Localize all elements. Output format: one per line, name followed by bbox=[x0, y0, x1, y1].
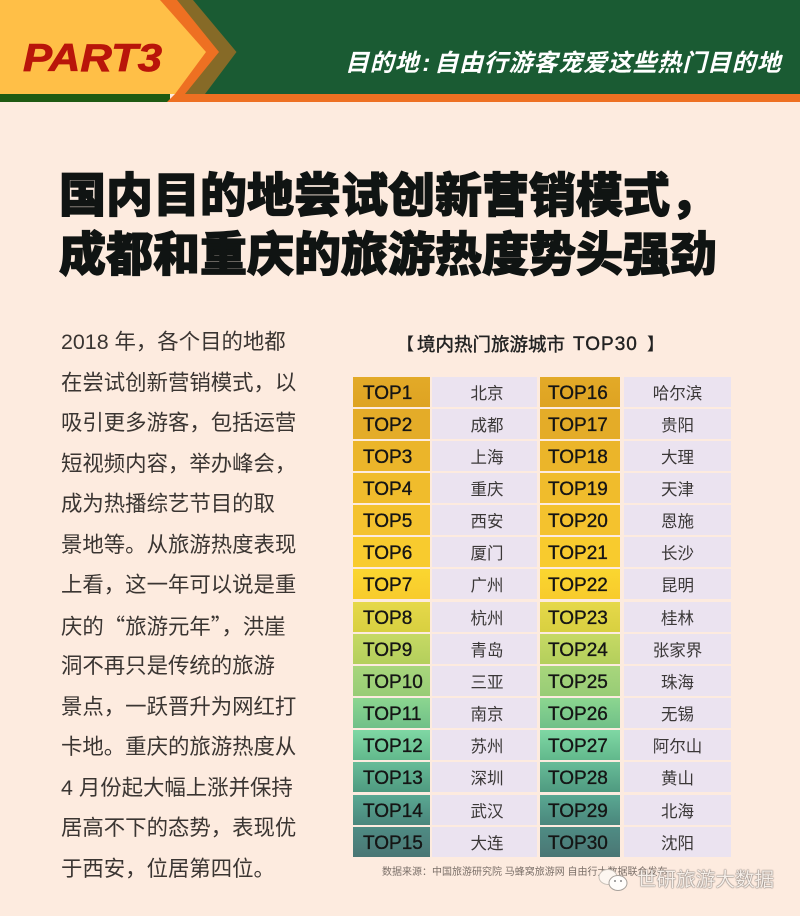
ranking table: 黄山 bbox=[661, 770, 694, 788]
ranking table: TOP9 bbox=[363, 640, 412, 661]
ranking table: TOP24 bbox=[548, 640, 608, 661]
ranking table: TOP16 bbox=[548, 383, 608, 404]
ranking table: 天津 bbox=[661, 481, 694, 499]
ranking table: TOP6 bbox=[363, 543, 412, 564]
ranking table: 苏州 bbox=[470, 738, 504, 756]
ranking table: TOP11 bbox=[363, 704, 421, 725]
data source note: 数据来源：中国旅游研究院 马蜂窝旅游网 自由行大数据联合发布 bbox=[382, 867, 668, 878]
table heading: TOP30 bbox=[573, 334, 638, 355]
body paragraph: 2018 年，各个目的地都 bbox=[61, 330, 286, 354]
ranking table: TOP25 bbox=[548, 672, 608, 693]
ranking table: TOP2 bbox=[363, 415, 412, 436]
ranking table: TOP14 bbox=[363, 801, 423, 822]
body paragraph: 在尝试创新营销模式，以 bbox=[61, 371, 296, 395]
ranking table: 桂林 bbox=[661, 610, 694, 628]
body paragraph: 短视频内容，举办峰会， bbox=[61, 452, 296, 476]
watermark text: 世研旅游大数据 bbox=[637, 869, 774, 891]
ranking table: TOP22 bbox=[548, 575, 608, 596]
body paragraph: 吸引更多游客，包括运营 bbox=[61, 411, 296, 435]
ranking table: 重庆 bbox=[470, 481, 504, 499]
ranking table: 成都 bbox=[470, 417, 504, 435]
body paragraph: 景地等。从旅游热度表现 bbox=[61, 533, 296, 557]
ranking table: TOP23 bbox=[548, 608, 608, 629]
ranking table: 广州 bbox=[470, 577, 504, 595]
ranking table: 大连 bbox=[470, 835, 504, 853]
ranking table: TOP30 bbox=[548, 833, 608, 854]
main headline bbox=[59, 169, 717, 281]
ranking table: 珠海 bbox=[661, 674, 694, 692]
ranking table: 恩施 bbox=[661, 513, 694, 531]
ranking table: TOP17 bbox=[548, 415, 608, 436]
ranking table: TOP3 bbox=[363, 447, 412, 468]
table heading: 【 bbox=[397, 335, 414, 354]
ranking table: TOP18 bbox=[548, 447, 608, 468]
ranking table: TOP13 bbox=[363, 768, 423, 789]
ranking table: TOP28 bbox=[548, 768, 608, 789]
icon: wechat watermark bbox=[598, 869, 628, 891]
ranking table bbox=[353, 377, 731, 857]
body paragraph: 4 月份起大幅上涨并保持 bbox=[61, 776, 293, 800]
PART3 badge: PART3 bbox=[23, 37, 162, 80]
table heading: 】 bbox=[647, 335, 664, 354]
ranking table: TOP8 bbox=[363, 608, 412, 629]
ranking table: TOP1 bbox=[363, 383, 412, 404]
body paragraph: 上看，这一年可以说是重 bbox=[61, 573, 296, 597]
ranking table: 阿尔山 bbox=[653, 738, 702, 756]
ranking table: 杭州 bbox=[470, 610, 504, 628]
ranking table: 贵阳 bbox=[661, 417, 694, 435]
ranking table: 北京 bbox=[470, 385, 504, 403]
ranking table: TOP10 bbox=[363, 672, 423, 693]
ranking table: TOP15 bbox=[363, 833, 423, 854]
ranking table: 深圳 bbox=[470, 770, 504, 788]
ranking table: TOP5 bbox=[363, 511, 412, 532]
ranking table: 长沙 bbox=[661, 545, 694, 563]
PART3 badge bbox=[0, 0, 206, 94]
table heading: 境内热门旅游城市 bbox=[417, 334, 565, 355]
ranking table: TOP19 bbox=[548, 479, 608, 500]
ranking table: TOP26 bbox=[548, 704, 608, 725]
main headline: 国内目的地尝试创新营销模式， bbox=[59, 169, 717, 222]
body paragraph: 洞不再只是传统的旅游 bbox=[61, 654, 275, 678]
ranking table: 昆明 bbox=[661, 577, 694, 595]
ranking table: TOP4 bbox=[363, 479, 412, 500]
ranking table: 沈阳 bbox=[661, 835, 694, 853]
ranking table: TOP20 bbox=[548, 511, 608, 532]
ranking table: 三亚 bbox=[470, 674, 504, 692]
ranking table: 张家界 bbox=[653, 642, 702, 660]
ranking table: 西安 bbox=[470, 513, 504, 531]
ranking table: TOP7 bbox=[363, 575, 412, 596]
main headline: 成都和重庆的旅游热度势头强劲 bbox=[59, 228, 717, 281]
ranking table: 无锡 bbox=[661, 706, 694, 724]
ranking table: TOP27 bbox=[548, 736, 608, 757]
body paragraph: 庆的“旅游元年”，洪崖 bbox=[61, 610, 286, 641]
body paragraph: 卡地。重庆的旅游热度从 bbox=[61, 735, 296, 759]
ranking table: 厦门 bbox=[470, 545, 504, 563]
ranking table: 武汉 bbox=[470, 803, 504, 821]
body paragraph: 居高不下的态势，表现优 bbox=[61, 816, 296, 840]
ranking table: TOP21 bbox=[548, 543, 608, 564]
section subtitle: 目的地:自由行游客宠爱这些热门目的地 bbox=[345, 50, 781, 77]
body paragraph: 于西安，位居第四位。 bbox=[61, 857, 275, 881]
ranking table: 哈尔滨 bbox=[653, 385, 702, 403]
header banner bbox=[0, 0, 800, 102]
table heading bbox=[397, 334, 664, 355]
body paragraph: 景点，一跃晋升为网红打 bbox=[61, 695, 296, 719]
ranking table: 大理 bbox=[661, 449, 694, 467]
ranking table: 南京 bbox=[470, 706, 504, 724]
ranking table: 上海 bbox=[470, 449, 504, 467]
ranking table: 青岛 bbox=[470, 642, 504, 660]
body paragraph: 成为热播综艺节目的取 bbox=[61, 492, 275, 516]
ranking table: TOP12 bbox=[363, 736, 423, 757]
ranking table: 北海 bbox=[661, 803, 694, 821]
ranking table: TOP29 bbox=[548, 801, 608, 822]
body paragraph bbox=[61, 330, 296, 881]
